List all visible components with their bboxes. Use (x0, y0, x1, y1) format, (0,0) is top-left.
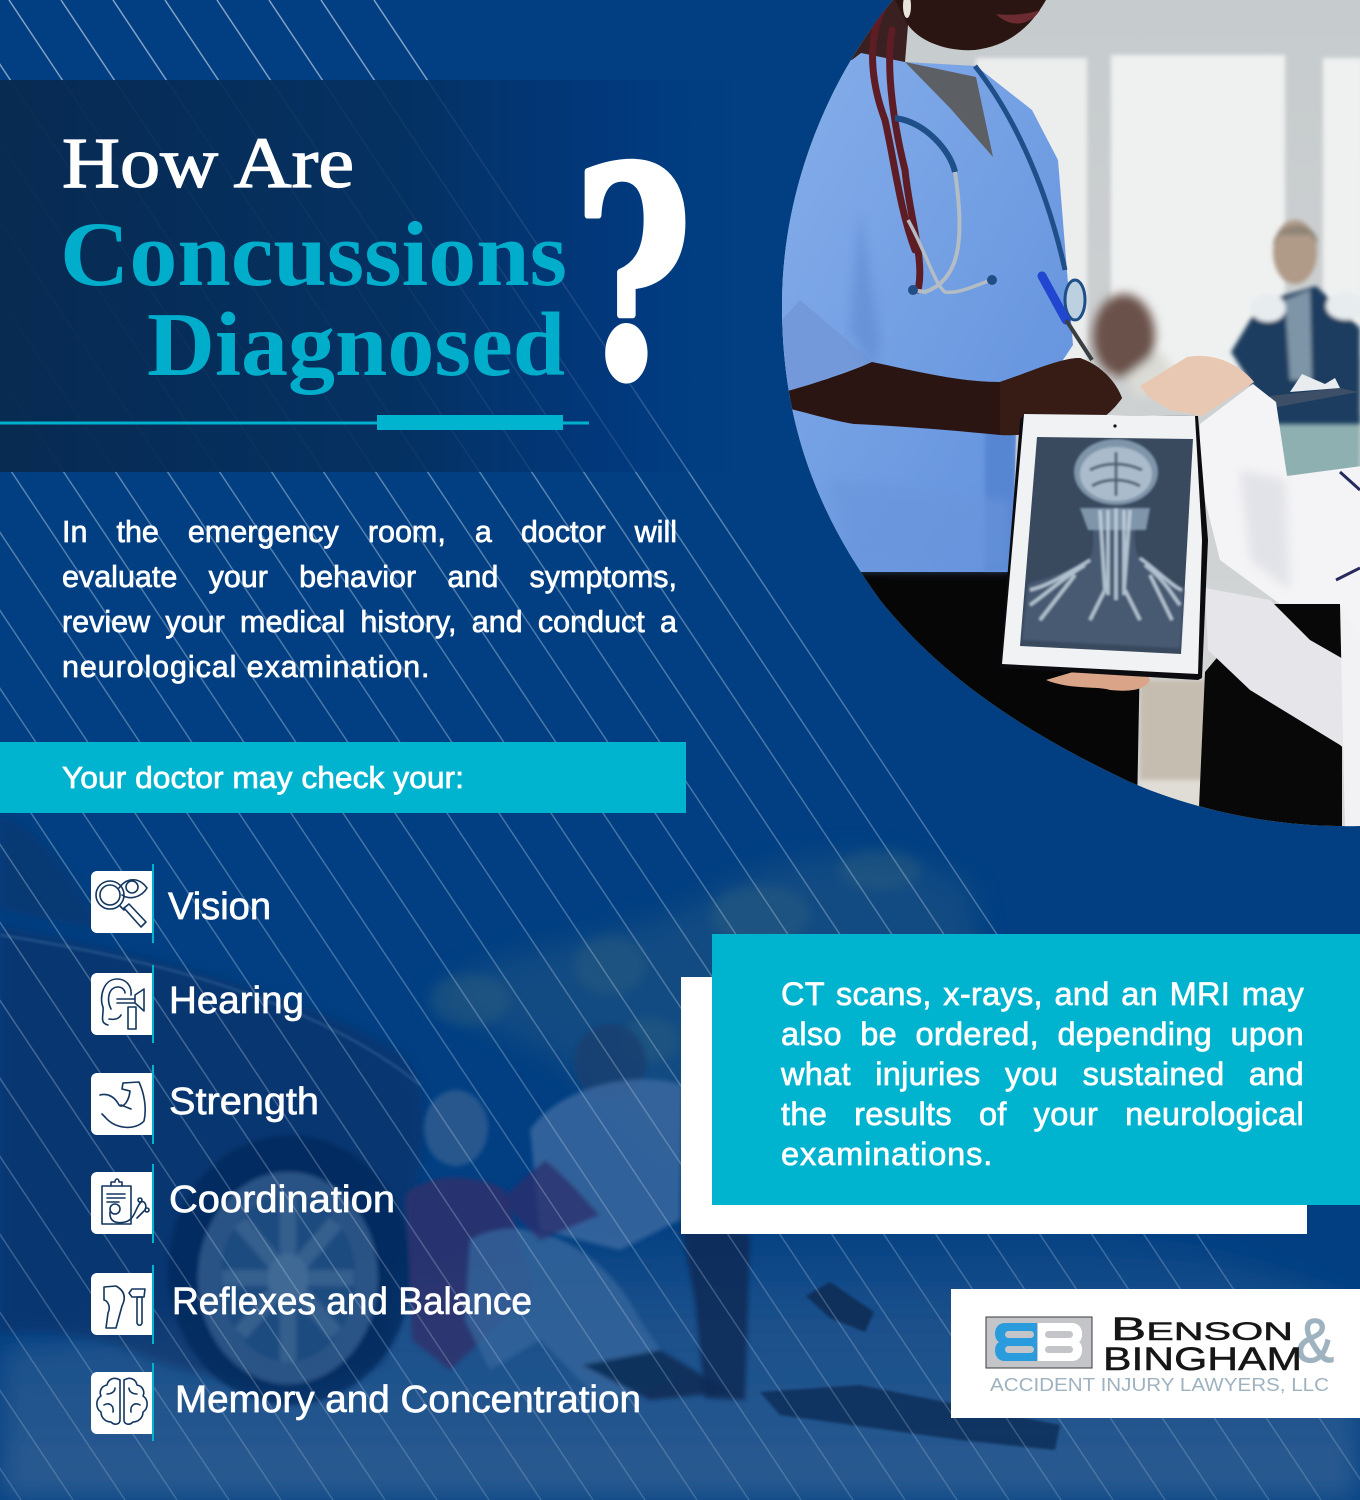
intro paragraph: evaluate your behavior and symptoms, (62, 560, 677, 594)
callout text (780, 976, 1304, 1172)
title line: Diagnosed: Diagnosed (147, 294, 565, 395)
callout text: also be ordered, depending upon (781, 1016, 1304, 1052)
checklist (91, 864, 641, 1441)
stethoscope (895, 66, 1085, 320)
title (60, 123, 567, 395)
icon: flexed arm (100, 1082, 145, 1127)
photo: nurse and doctor with MRI tablet (770, 0, 1360, 830)
callout text: the results of your neurological (781, 1096, 1304, 1132)
man crouching (500, 1024, 750, 1400)
logo: Benson and Bingham: BINGHAM (1103, 1341, 1302, 1377)
panel: title backdrop (0, 80, 730, 472)
trees (430, 855, 990, 1200)
nurse pants (854, 560, 1140, 785)
intro paragraph (62, 515, 678, 684)
car body (0, 925, 424, 1385)
hair braid (873, 10, 920, 290)
doctor hand (1140, 356, 1254, 416)
callout text: CT scans, x-rays, and an MRI may (781, 976, 1304, 1012)
car hood edge (0, 935, 420, 1085)
title underline (0, 415, 589, 430)
MRI screen (1020, 437, 1193, 654)
title line: Concussions: Concussions (60, 203, 567, 305)
intro paragraph: neurological examination. (62, 650, 430, 684)
icon: magnifier and eye (96, 880, 147, 927)
woman seated (405, 1090, 730, 1400)
tablet (1000, 414, 1208, 680)
item: coordination (91, 1164, 395, 1243)
room background (780, 0, 1360, 830)
item: strength (91, 1065, 319, 1144)
question mark: ? (574, 106, 692, 444)
debris (760, 1282, 1060, 1450)
item: hearing: Hearing (169, 980, 304, 1022)
item: hearing (91, 965, 304, 1043)
item: vision (91, 864, 271, 943)
doctor pants (1198, 604, 1342, 830)
item: coordination: Coordination (169, 1179, 395, 1221)
logo mark (986, 1317, 1092, 1368)
shoulder shadow (850, 0, 910, 62)
item: vision: Vision (168, 886, 271, 928)
fingers under tablet (1046, 672, 1150, 691)
wheel (168, 1135, 412, 1405)
logo tagline: ACCIDENT INJURY LAWYERS, LLC (990, 1375, 1329, 1395)
doctor sleeves (1206, 588, 1343, 748)
road (0, 1213, 1360, 1500)
background: faint accident scene photo (0, 815, 1360, 1500)
title line: How Are: How Are (62, 123, 354, 203)
callout text: what injuries you sustained and (781, 1056, 1304, 1092)
teal strip: your doctor may check your: Your doctor may check your: (62, 760, 464, 795)
neck and chin (895, 0, 1046, 50)
callout: white offset backing (681, 977, 1307, 1234)
teal strip: your doctor may check your (0, 742, 686, 813)
background woman (1093, 294, 1175, 400)
icon: clipboard and stethoscope (102, 1179, 149, 1224)
item: memory and concentration (91, 1363, 641, 1441)
arm (784, 358, 1122, 435)
icon: brain (97, 1378, 147, 1424)
nurse scrubs (770, 53, 1073, 572)
item: reflexes and balance (91, 1265, 532, 1344)
logo ampersand: & (1296, 1307, 1334, 1376)
icon: ear with tuning instrument (102, 979, 144, 1029)
callout: teal panel (712, 934, 1360, 1205)
icon: knee and reflex hammer (104, 1286, 145, 1328)
item: reflexes and balance: Reflexes and Balance (172, 1281, 532, 1323)
callout text: examinations. (781, 1136, 993, 1172)
undershirt (905, 62, 993, 157)
item: memory and concentration: Memory and Concentration (175, 1379, 641, 1421)
clipboard (1270, 388, 1358, 408)
intro paragraph: In the emergency room, a doctor will (62, 515, 677, 549)
logo: Benson and Bingham (951, 1289, 1360, 1418)
pen (1042, 276, 1066, 320)
background man (1231, 220, 1360, 424)
logo name: B ENSON (1111, 1311, 1293, 1347)
intro paragraph: review your medical history, and conduct a (62, 605, 677, 639)
item: strength: Strength (169, 1081, 319, 1123)
